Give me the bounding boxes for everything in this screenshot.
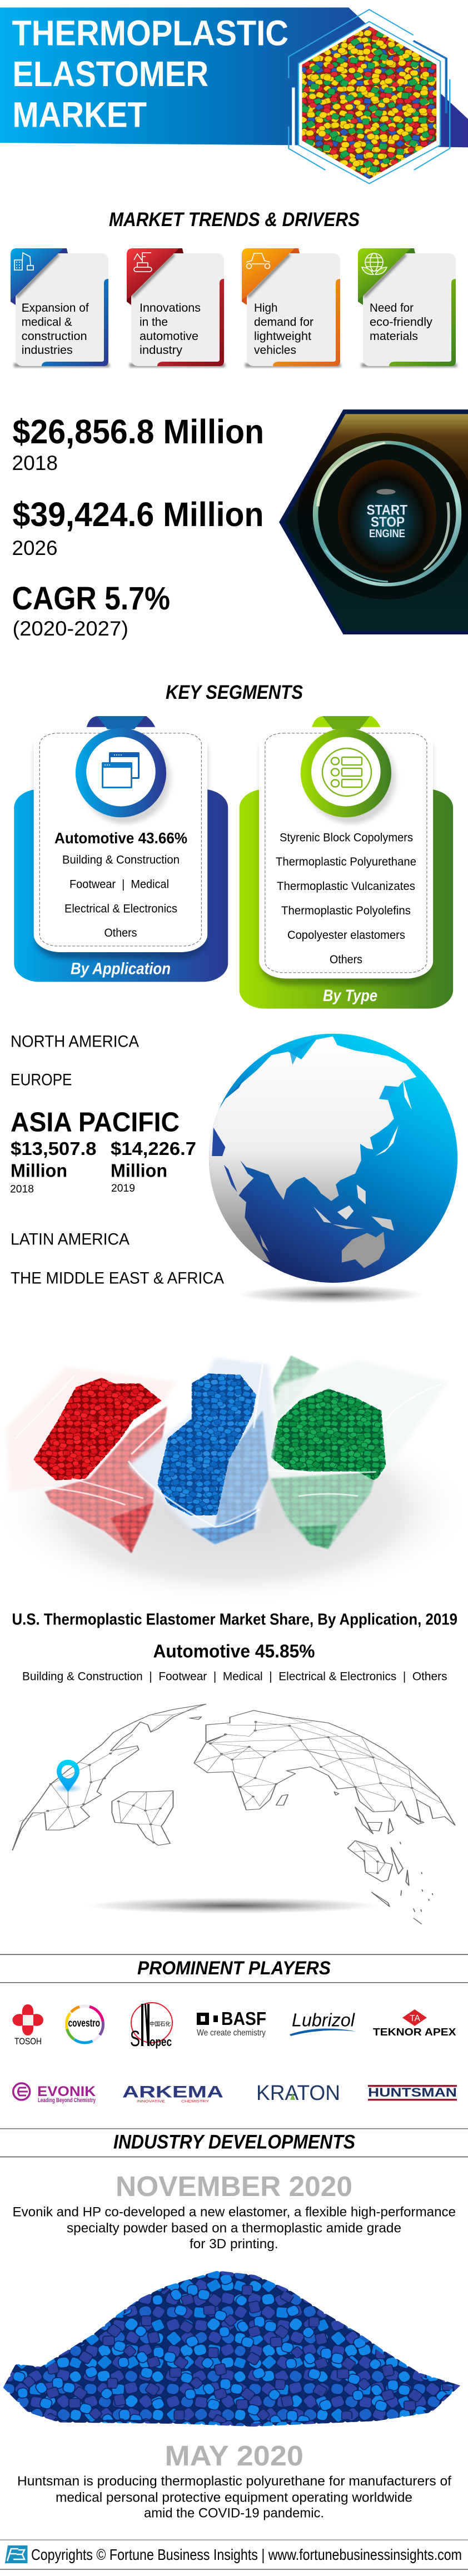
segment list: Copolyester elastomers (287, 929, 405, 942)
development: November 2020 (12, 2170, 456, 2252)
card text: materials (370, 329, 418, 343)
card text: lightweight (254, 329, 311, 343)
logo: Sinopec (130, 2003, 172, 2051)
icon: globe and leaves (362, 253, 387, 274)
region labels: NORTH AMERICA (11, 1032, 139, 1051)
panel shapes (14, 716, 228, 982)
segment list: Others (330, 953, 362, 966)
Asia Pacific figures: $13,507.8 (11, 1138, 97, 1159)
logo: Covestro: covestro (68, 2018, 100, 2029)
section heading: key segments: KEY SEGMENTS (166, 682, 303, 703)
icon: light vehicle (246, 253, 270, 269)
development: November 2020: for 3D printing. (190, 2237, 278, 2252)
logo: Tosoh (12, 2004, 43, 2047)
region labels (11, 1032, 224, 1287)
button label: STOP (371, 514, 405, 530)
logo: Arkema: CHEMISTRY (181, 2100, 210, 2104)
photo: engine start stop button (279, 409, 468, 634)
logo: Evonik (13, 2083, 96, 2104)
region labels: EUROPE (11, 1071, 72, 1089)
card text: industries (22, 343, 73, 357)
section heading: prominent players: PROMINENT PLAYERS (137, 1958, 331, 1979)
logo: Arkema (122, 2083, 223, 2104)
leading segment: Automotive 45.85% (153, 1642, 315, 1662)
panel shapes (240, 716, 453, 1009)
development: November 2020: Evonik and HP co-developed a new elastomer, a flexible high-performance (12, 2205, 456, 2220)
section heading: industry developments: INDUSTRY DEVELOPMENTS (113, 2131, 355, 2153)
logo: Teknor Apex: TEKNOR APEX (373, 2027, 456, 2038)
card text: Innovations (140, 301, 201, 314)
segment list (54, 829, 187, 939)
footer (0, 2540, 468, 2570)
region labels: THE MIDDLE EAST & AFRICA (11, 1269, 224, 1287)
segment list: Automotive 43.66% (54, 829, 187, 847)
button label (367, 502, 407, 540)
card: automotive innovations (127, 248, 225, 367)
logo: Evonik: EVONIK (37, 2084, 96, 2099)
card text (370, 301, 432, 343)
region labels: LATIN AMERICA (11, 1231, 130, 1249)
Asia Pacific figures: 2019 (111, 1183, 135, 1194)
title (12, 13, 288, 135)
logo: BASF: We create chemistry (197, 2028, 266, 2038)
card text: construction (22, 329, 87, 343)
card text (140, 301, 201, 357)
stat: 2026 market size (12, 496, 263, 559)
icon: Fortune Business Insights logo (5, 2545, 28, 2563)
stat: 2026 market size: $39,424.6 Million (12, 496, 263, 533)
button label: START (367, 502, 407, 518)
logo: Huntsman: HUNTSMAN (368, 2085, 457, 2099)
segment list: Electrical & Electronics (64, 902, 177, 916)
development: May 2020: medical personal protective equipment operating worldwide (56, 2490, 412, 2505)
card text: eco-friendly (370, 316, 432, 329)
development: November 2020: NOVEMBER 2020 (116, 2170, 352, 2202)
development: May 2020: Huntsman is producing thermoplastic polyurethane for manufacturers of (17, 2474, 451, 2489)
Asia Pacific figures: Million (11, 1160, 67, 1181)
logo: Huntsman (368, 2085, 457, 2100)
logo: Teknor Apex: TA (410, 2014, 420, 2023)
logo: Lubrizol: Lubrizol (292, 2010, 356, 2030)
logo: Arkema: ARKEMA (122, 2083, 223, 2102)
segment list: Building & Construction | Footwear | Medical | Electrical & Electronics | Others (22, 1670, 447, 1683)
segment list: Footwear | Medical (69, 878, 169, 891)
photo: bags of coloured pellets (0, 1355, 468, 1606)
card text: Expansion of (22, 301, 89, 314)
segment list: Thermoplastic Polyurethane (276, 856, 416, 868)
segment list: Styrenic Block Copolymers (280, 831, 413, 844)
section heading: market trends and drivers: MARKET TRENDS & DRIVERS (109, 209, 360, 231)
development: May 2020 (17, 2440, 451, 2521)
card text (254, 301, 313, 357)
blue bag (128, 1358, 275, 1544)
title: ELASTOMER (12, 54, 208, 94)
panel: market trend cards (11, 248, 457, 367)
icon: application windows (102, 752, 140, 788)
card: eco-friendly materials (358, 248, 457, 367)
red bag (6, 1367, 176, 1553)
header banner (0, 7, 468, 183)
card text: medical & (22, 316, 72, 329)
logo: Arkema: INNOVATIVE (137, 2100, 166, 2104)
banner background (0, 7, 468, 147)
card: medical and construction (11, 248, 109, 367)
stat: 2018 market size: 2018 (12, 452, 58, 474)
panel: segments by application (14, 716, 228, 982)
stat: CAGR (12, 581, 170, 640)
stat: 2018 market size (12, 413, 264, 474)
panel: US market share (12, 1610, 457, 1924)
stat: CAGR: CAGR 5.7% (12, 581, 170, 617)
segment list (276, 831, 416, 966)
panel: segments by type (240, 716, 453, 1009)
development: May 2020: amid the COVID-19 pandemic. (144, 2506, 324, 2521)
card: lightweight vehicles (242, 248, 341, 367)
title: THERMOPLASTIC (12, 13, 288, 53)
panel: market size statistics (12, 409, 468, 640)
Asia Pacific figures: $14,226.7 (111, 1138, 196, 1159)
hexagon pellet photo (288, 9, 450, 183)
photo: blue pellet pile (7, 2274, 454, 2423)
icon: building and crane (14, 253, 33, 270)
logo: Sinopec: S (130, 2027, 140, 2051)
card text: automotive (140, 329, 198, 343)
logo: Covestro (59, 1998, 111, 2050)
card text: Need for (370, 301, 414, 314)
segment list: Thermoplastic Vulcanizates (277, 880, 415, 893)
segment list: Building & Construction (62, 854, 180, 867)
icon: type list (322, 748, 371, 796)
logo: BASF (197, 2008, 266, 2038)
panel: regional breakdown (10, 1032, 457, 1304)
green bag (257, 1355, 448, 1549)
label: by application: By Application (71, 960, 171, 978)
stat: 2018 market size: $26,856.8 Million (12, 413, 264, 451)
Asia Pacific figures (10, 1108, 196, 1196)
card text: industry (140, 343, 182, 357)
logo: Sinopec: 中国石化 (150, 2020, 171, 2028)
card text (22, 301, 89, 357)
icon: robot arm on conveyor (134, 253, 152, 272)
panel: company logos (12, 1998, 457, 2105)
development: May 2020: MAY 2020 (165, 2440, 303, 2472)
button label: ENGINE (369, 528, 405, 540)
Asia Pacific figures: Million (111, 1160, 167, 1181)
card text: vehicles (254, 343, 296, 357)
development: November 2020: specialty powder based on a thermoplastic amide grade (67, 2221, 401, 2236)
logo: Teknor Apex (373, 2009, 456, 2038)
card text: High (254, 301, 278, 314)
stat: CAGR: (2020-2027) (12, 617, 128, 640)
stat: 2026 market size: 2026 (12, 537, 58, 559)
logo: Sinopec: opec (150, 2035, 172, 2049)
logo: Kraton: KRATON (256, 2082, 340, 2105)
card text: in the (140, 316, 168, 329)
Asia Pacific figures: 2018 (10, 1184, 34, 1196)
location pin (54, 1760, 82, 1793)
segment list: Others (104, 927, 137, 939)
logo: Evonik: Leading Beyond Chemistry (38, 2097, 96, 2104)
label: by type: By Type (323, 987, 377, 1005)
globe (203, 1034, 457, 1304)
wireframe world map (13, 1704, 455, 1924)
logo: Tosoh: TOSOH (14, 2036, 42, 2047)
Asia Pacific figures: ASIA PACIFIC (11, 1108, 180, 1138)
segment list: Thermoplastic Polyolefins (281, 904, 411, 917)
card text: demand for (254, 316, 313, 329)
logo: BASF: BASF (221, 2008, 266, 2029)
title: MARKET (12, 95, 147, 135)
